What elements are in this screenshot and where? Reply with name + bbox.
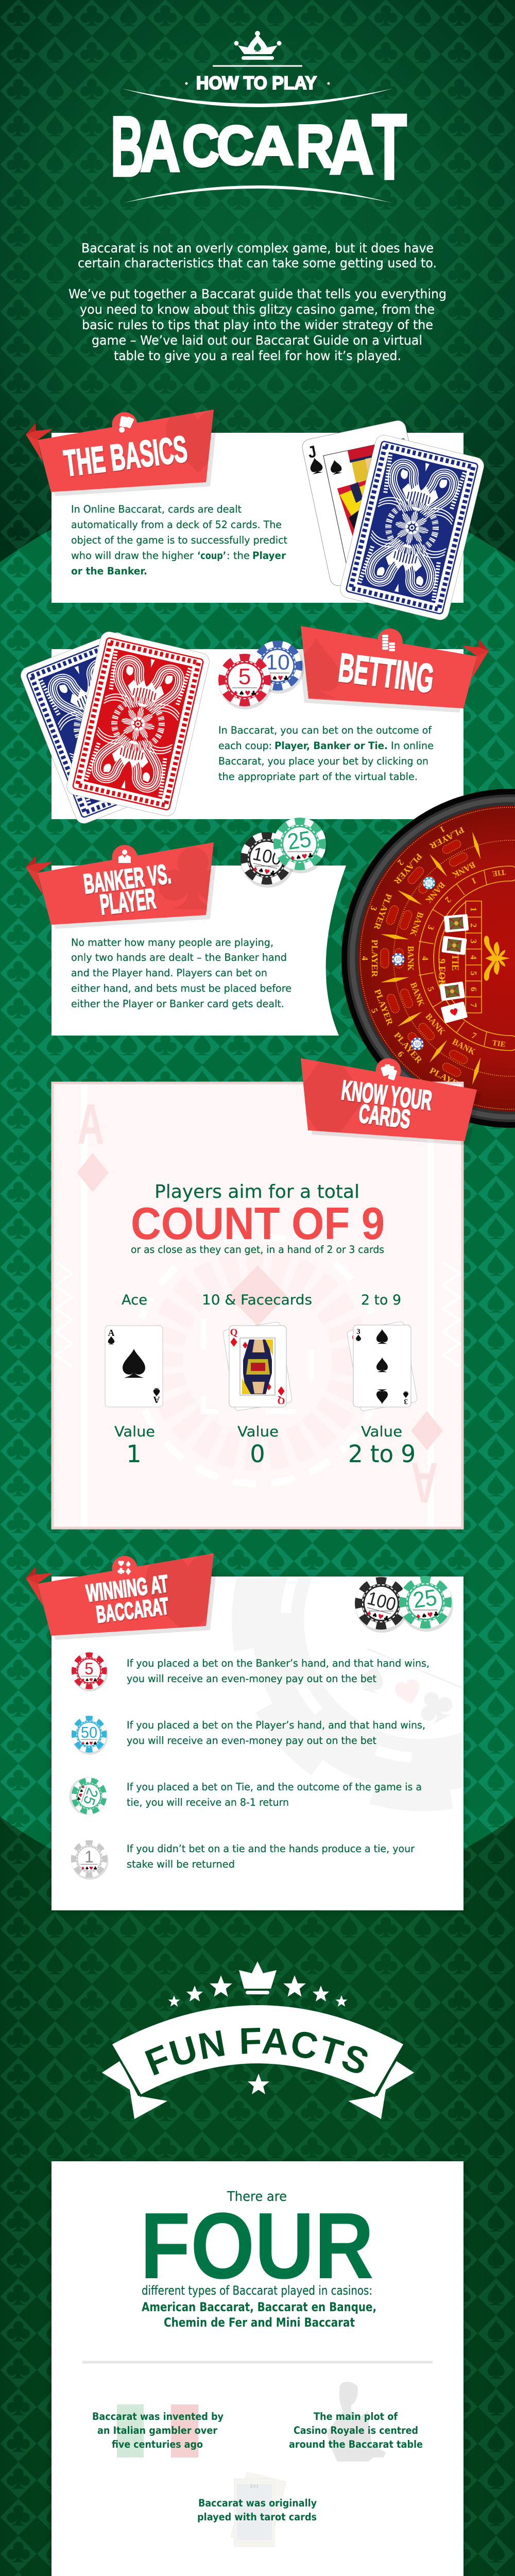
cards: ten and queen: Q [278, 1395, 285, 1406]
table labels: 4 [360, 956, 370, 961]
table labels [360, 824, 506, 1092]
fact: tarot cards [197, 2472, 317, 2547]
text: the basics: object of the game is to successfully predict [71, 534, 287, 546]
bet grid: 2 [469, 923, 478, 927]
cards: ten and queen: Q [230, 1327, 237, 1338]
chip: green 25 [398, 1575, 453, 1632]
intro text: Baccarat is not an overly complex game, but it does have [81, 241, 434, 256]
table labels: 4 [420, 956, 430, 961]
rule: tie: tie, you will receive an 8-1 return [127, 1797, 289, 1808]
chips on table: 10 [415, 1041, 420, 1046]
table labels: 3 [425, 924, 436, 931]
chip: red 5 [217, 653, 272, 709]
heading: how to play: HOW TO PLAY [196, 73, 317, 93]
rule: player hand: 50 [81, 1724, 97, 1741]
chips on table: 10 [396, 956, 401, 961]
chip: green 25: ♦♠♥♣ [415, 1611, 440, 1621]
chip: green 25: ♦♠♥♣ [289, 852, 314, 863]
rule under crown [213, 65, 302, 67]
text: there are four: FOUR [140, 2193, 374, 2298]
banner: winning at baccarat: WINNING AT [84, 1570, 169, 1607]
intro text: basic rules to tips that play into the wider strategy of the [82, 317, 433, 332]
chip: blue 10: ♦♠♥♣ [266, 675, 289, 682]
column: 2 to 9: Value [361, 1423, 402, 1440]
chip: black 100: 100 [365, 1587, 399, 1615]
column: 2 to 9 [347, 1292, 418, 1468]
text: banker vs player: and the Player hand. Players can bet on [71, 967, 267, 979]
rule: stake returned: If you didn’t bet on a tie and the hands produce a tie, your [127, 1843, 415, 1855]
card: ace of spades: A [108, 1328, 114, 1338]
banner: banker vs player: BANKER VS. [82, 859, 173, 900]
table labels: TIE [492, 868, 506, 877]
table labels: 7 [470, 1030, 478, 1041]
rule: stake returned: 1 [84, 1848, 94, 1866]
text: the basics: automatically from a deck of 52 cards. The [71, 519, 282, 531]
title: baccarat: A [329, 104, 374, 190]
title: baccarat [111, 95, 407, 199]
bet grid: 7 [469, 1003, 478, 1008]
text: there are four: Chemin de Fer and Mini Baccarat [164, 2315, 355, 2330]
text: betting: In online [391, 740, 434, 752]
text: betting: each coup: [218, 740, 272, 752]
playing card: jack of spades [301, 419, 435, 587]
rule: tie: 25 [80, 1786, 101, 1807]
table labels: PLAYER [392, 1030, 424, 1065]
banner: the basics: THE BASICS [62, 429, 190, 484]
text: the basics: who will draw the higher [71, 550, 194, 562]
text: there are four: American Baccarat, Baccarat en Banque, [142, 2300, 376, 2314]
swoosh above title [122, 89, 392, 107]
bet grid: 1 [469, 907, 478, 911]
chip: red 5: ♦♠♥♣ [233, 690, 256, 698]
fact: casino royale [289, 2382, 423, 2462]
table labels: BANK [451, 1037, 477, 1057]
text: betting: In Baccarat, you can bet on the outcome of [218, 724, 432, 736]
banner: betting: BETTING [336, 645, 436, 701]
table labels: BANK [408, 981, 426, 1008]
text: banker vs player: either the Player or Banker card gets dealt. [71, 998, 284, 1010]
icon: star [248, 2074, 269, 2094]
intro text: We’ve put together a Baccarat guide that tells you everything [68, 286, 447, 301]
bet grid: 6 [469, 987, 478, 991]
cards: six and three: 3 [356, 1328, 360, 1336]
bet grid: 3 [469, 939, 478, 943]
chip watermark [232, 1577, 464, 1811]
rule: banker hand: 5 [84, 1659, 94, 1678]
intro text: certain characteristics that can take some getting used to. [78, 256, 437, 270]
card: ace of spades [105, 1326, 163, 1407]
title: baccarat: A [252, 115, 294, 176]
table labels: PLAYER [372, 988, 395, 1027]
table labels: BANK [406, 946, 416, 971]
fact: tarot cards: Baccarat was originally [198, 2497, 317, 2509]
rule: banker hand: If you placed a bet on the Banker’s hand, and that hand wins, [127, 1657, 430, 1669]
text: the basics: or the Banker. [71, 565, 147, 577]
banner: banker vs player [26, 842, 228, 929]
chip: green 25 [272, 817, 328, 873]
intro text: you need to know about this glitzy casino game, from the [80, 302, 435, 317]
chip: black 100: ♦♠♥♣ [365, 1609, 390, 1623]
column: 2 to 9: 2 to 9 [348, 1440, 416, 1468]
rule: player hand: ♦♠♥♣ [81, 1741, 97, 1747]
heading: players aim: Players aim for a total [154, 1181, 359, 1202]
rule: player hand [71, 1715, 425, 1755]
cards: six and three: 3 [404, 1397, 408, 1405]
table labels: 5 [425, 985, 436, 993]
fact: italian gambler: an Italian gambler over [97, 2425, 217, 2436]
text: there are four: different types of Baccarat played in casinos: [142, 2283, 372, 2298]
card watermark: A [77, 1093, 104, 1156]
panel: betting [18, 626, 489, 826]
table labels: PLAYER [427, 825, 466, 851]
card watermark [56, 1084, 459, 1527]
text: there are four: There are [227, 2189, 287, 2205]
rule: stake returned: ♦♠♥♣ [81, 1866, 97, 1871]
table labels: 9 FOR [436, 959, 447, 987]
playing card: jack of spades: J [306, 442, 318, 462]
fact: casino royale: The main plot of [314, 2411, 398, 2422]
chips on table [391, 877, 435, 1051]
text: the basics: : the [227, 550, 250, 562]
chip: green 25: 25 [411, 1585, 438, 1613]
cards: six and three: 6 [351, 1334, 356, 1342]
fact: tarot cards: XVI [250, 2484, 258, 2489]
table labels: BANK [450, 860, 477, 880]
text: banker vs player: either hand, and bets must be placed before [71, 982, 291, 994]
table labels: 1 [470, 875, 478, 886]
card back: blue left [18, 630, 183, 826]
text: banker vs player: No matter how many people are playing, [71, 937, 273, 948]
intro text: game – We’ve laid out our Baccarat Guide on a virtual [92, 333, 422, 348]
banner: know your cards [301, 1058, 481, 1145]
rule: banker hand [71, 1652, 430, 1691]
banner: know your cards: CARDS [357, 1099, 412, 1134]
heading: count of 9: COUNT OF 9 [131, 1198, 385, 1249]
icon: crown and stars [168, 1961, 347, 2007]
intro text: table to give you a real feel for how it’s played. [114, 348, 401, 363]
chip: black 100 [354, 1576, 409, 1633]
panel: know your cards [53, 1048, 481, 1528]
text: the basics: Player [252, 550, 286, 562]
cards: ten and queen: 10 [227, 1333, 236, 1342]
title: baccarat: A [140, 106, 180, 187]
rule: tie [64, 1771, 422, 1821]
cards: six and three [347, 1321, 418, 1412]
table labels: BANK [423, 880, 447, 905]
text: the basics: ‘coup’ [197, 550, 226, 562]
table labels: PLAYER [428, 1065, 466, 1092]
text: banker vs player [71, 937, 291, 1010]
panel: banker vs player [26, 817, 346, 1036]
chip: black 100 [239, 831, 295, 888]
banner: banker vs player: PLAYER [98, 883, 157, 921]
fact: italian gambler: Baccarat was invented by [92, 2411, 224, 2422]
table labels: 2 [396, 858, 406, 867]
text: betting [218, 724, 434, 783]
icon: fleur-de-lis [484, 936, 510, 981]
banner: betting [293, 626, 489, 713]
chip: red 5: 5 [238, 664, 251, 689]
bet grid: 5 [469, 971, 478, 975]
icon: crown [234, 31, 281, 60]
table labels: BANK [408, 911, 425, 938]
panel: winning at baccarat [26, 1553, 466, 1912]
rule: tie: ♦♠♥♣ [75, 1784, 85, 1802]
table labels: 3 [368, 905, 379, 912]
rule: stake returned: stake will be returned [127, 1858, 235, 1870]
table labels: 5 [369, 1007, 380, 1014]
chips on table: 50 [426, 880, 432, 885]
column: ace: Value [114, 1423, 155, 1440]
fact: casino royale: around the Baccarat table [289, 2438, 423, 2450]
chip: blue 10: 10 [265, 650, 290, 674]
rule: tie: If you placed a bet on Tie, and the outcome of the game is a [127, 1781, 422, 1793]
text: betting: Baccarat, you place your bet by clicking on [218, 755, 428, 767]
cards: ten and queen [222, 1321, 293, 1411]
ribbon text: FUN FACTS [145, 2028, 368, 2075]
text: there are four [140, 2189, 376, 2330]
column: ace: Ace [122, 1292, 147, 1308]
card back: red [65, 630, 211, 818]
text: betting: the appropriate part of the virtual table. [218, 771, 418, 783]
bet grid: 4 [469, 955, 478, 960]
chip: blue 10 [252, 640, 304, 693]
subheading: or as close as they can get, in a hand of 2 or 3 cards [131, 1244, 384, 1256]
rule: stake returned [71, 1840, 415, 1879]
banner: winning at baccarat: BACCARAT [95, 1593, 170, 1628]
column: ace [105, 1292, 163, 1468]
table labels: 2 [443, 895, 453, 905]
title: baccarat: B [111, 99, 144, 194]
fact: italian gambler: five centuries ago [112, 2438, 203, 2450]
chip: green 25: 25 [286, 826, 313, 855]
table labels: 6 [396, 1049, 406, 1059]
card: ace of spades: A [153, 1395, 160, 1405]
card watermark: A [411, 1451, 438, 1514]
rule: player hand: you will receive an even-money pay out on the bet [127, 1735, 376, 1747]
column: 10 and facecards: 10 & Facecards [202, 1292, 312, 1308]
rule: player hand: If you placed a bet on the Player’s hand, and that hand wins, [127, 1719, 425, 1731]
column: 10 and facecards: Value [237, 1423, 279, 1440]
fun facts emblem [102, 1961, 414, 2119]
banner: the basics [26, 410, 230, 496]
gold dividers [381, 831, 483, 1086]
card back: blue [338, 433, 486, 622]
table labels: TIE [450, 954, 460, 971]
betting pills [381, 839, 469, 1078]
swoosh below title [123, 185, 392, 203]
table labels: PLAYER [370, 940, 380, 977]
rule: banker hand: ♦♠♥♣ [81, 1678, 97, 1683]
title: baccarat: C [182, 113, 219, 178]
table labels: BANK [423, 1011, 448, 1037]
text: betting: Player, Banker or Tie. [274, 740, 388, 752]
table labels: 1 [438, 824, 447, 835]
fact: casino royale: Casino Royale is centred [294, 2425, 418, 2436]
chip: black 100: 100 [251, 843, 284, 869]
cards on table [439, 914, 469, 1023]
column: 2 to 9: 2 to 9 [361, 1292, 401, 1308]
chip: black 100: ♦♠♥♣ [251, 866, 277, 878]
table labels: TIE [492, 1039, 506, 1049]
table labels: PLAYER [392, 852, 424, 887]
text: the basics: In Online Baccarat, cards are dealt [71, 503, 242, 515]
table labels: PLAYER [372, 892, 394, 931]
banner: know your cards: KNOW YOUR [340, 1075, 434, 1116]
panel: fun facts [52, 2161, 464, 2576]
ribbon [102, 2005, 414, 2119]
intro text [68, 241, 447, 363]
text: the basics [71, 503, 287, 577]
column: 10 and facecards: 0 [250, 1440, 265, 1468]
column: ace: 1 [126, 1440, 142, 1468]
banner: winning at baccarat [26, 1553, 230, 1640]
title: baccarat: C [217, 114, 254, 176]
baccarat table [341, 789, 515, 1128]
panel: the basics [26, 410, 486, 622]
text: banker vs player: only two hands are dealt – the Banker hand [71, 952, 287, 963]
bet grid [466, 901, 482, 1013]
fact: italian gambler [92, 2404, 224, 2458]
rule: banker hand: you will receive an even-money pay out on the bet [127, 1673, 376, 1685]
fact: tarot cards: played with tarot cards [197, 2511, 317, 2523]
title: baccarat: T [372, 95, 407, 199]
title: baccarat: R [296, 112, 334, 180]
column: 10 and facecards [202, 1292, 312, 1468]
